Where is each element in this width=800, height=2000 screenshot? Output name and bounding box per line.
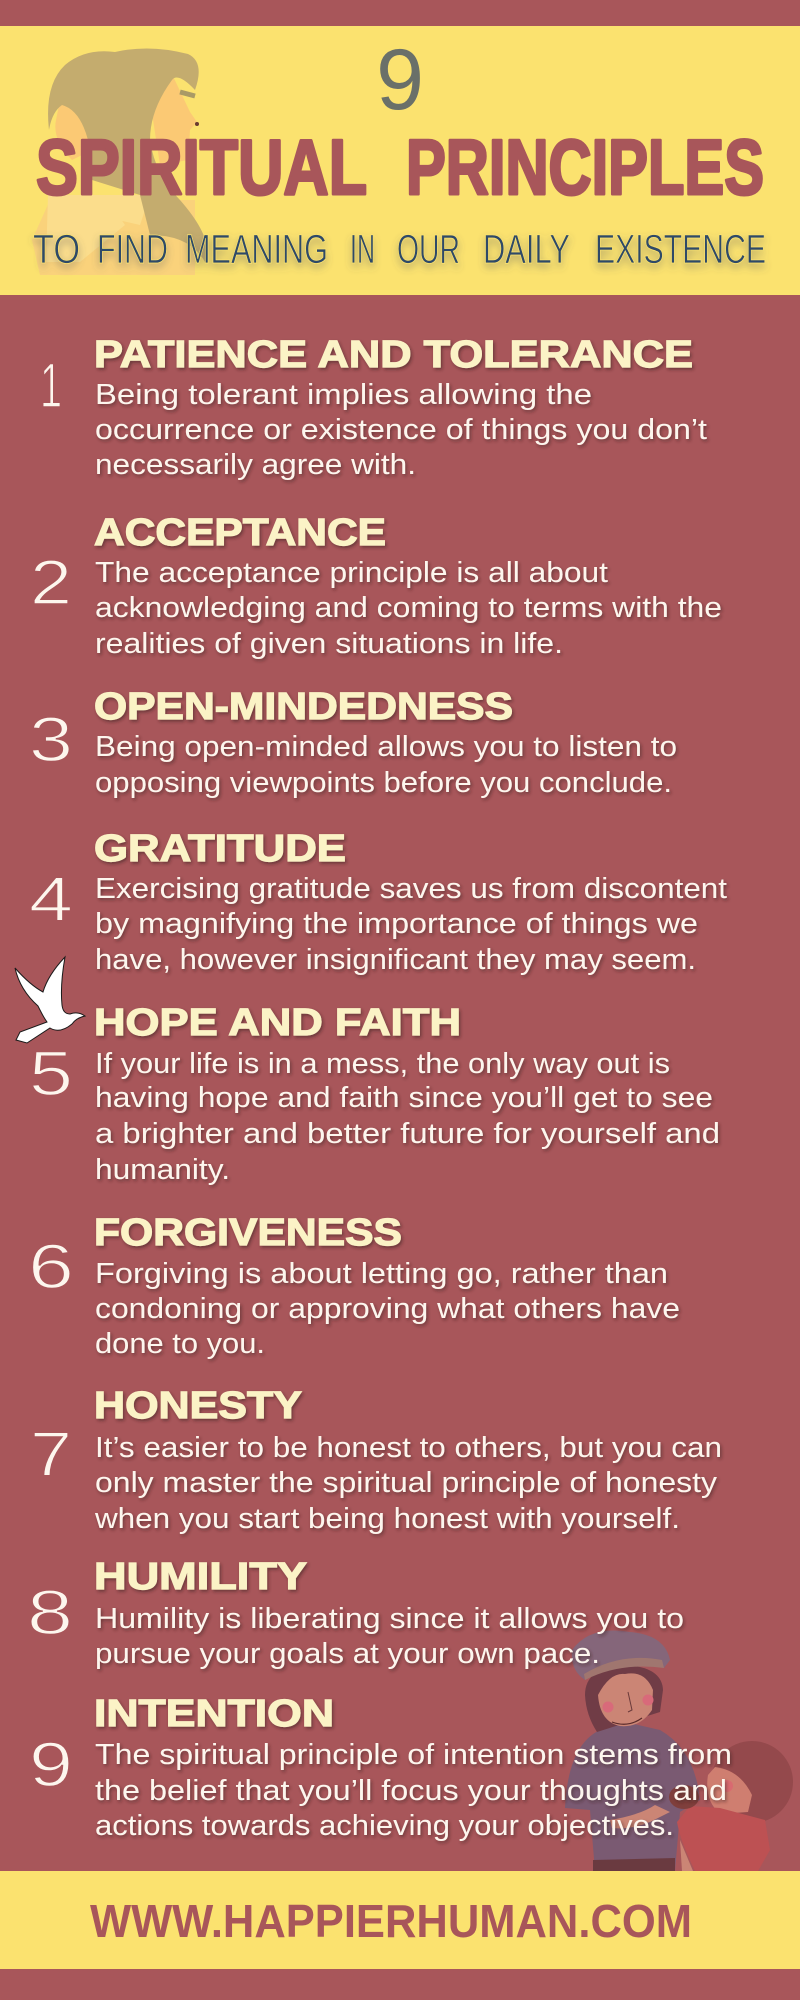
subtitle: IN xyxy=(350,226,375,272)
item 8: humility: pursue your goals at your own pace. xyxy=(95,1638,600,1670)
header band xyxy=(0,26,800,295)
item 6: forgiveness: 6 xyxy=(28,1232,74,1302)
item 9: intention: actions towards achieving your objectives. xyxy=(95,1810,674,1842)
item 7: honesty xyxy=(30,1385,722,1535)
item 7: honesty: when you start being honest with yourself. xyxy=(94,1503,680,1535)
subtitle: DAILY xyxy=(483,226,570,272)
item 5: hope and faith: HOPE AND FAITH xyxy=(94,1002,461,1044)
item 9: intention: 9 xyxy=(29,1730,73,1800)
item 4: gratitude: 4 xyxy=(29,865,73,935)
item 9: intention: INTENTION xyxy=(94,1693,334,1735)
item 5: hope and faith: 5 xyxy=(29,1039,73,1109)
footer band xyxy=(0,1871,800,1969)
item 3: open-mindedness: Being open-minded allows you to listen to xyxy=(95,731,677,763)
illustration: officer and child xyxy=(565,1630,793,1871)
item 5: hope and faith: having hope and faith since you’ll get to see xyxy=(95,1082,713,1114)
heading number 9: 9 xyxy=(376,32,424,128)
item 1: patience and tolerance: PATIENCE AND TOLERANCE xyxy=(94,334,693,376)
item 6: forgiveness: FORGIVENESS xyxy=(94,1212,402,1254)
item 6: forgiveness: condoning or approving what others have xyxy=(95,1293,680,1325)
item 5: hope and faith: If your life is in a mess, the only way out is xyxy=(95,1048,670,1080)
item 8: humility: HUMILITY xyxy=(94,1556,307,1598)
item 1: patience and tolerance: occurrence or existence of things you don’t xyxy=(95,414,707,446)
item 1: patience and tolerance: Being tolerant implies allowing the xyxy=(95,379,592,411)
item 2: acceptance: acknowledging and coming to terms with the xyxy=(95,592,722,624)
item 5: hope and faith xyxy=(29,1002,720,1186)
item 1: patience and tolerance: necessarily agree with. xyxy=(95,449,416,481)
item 3: open-mindedness: OPEN-MINDEDNESS xyxy=(94,686,513,728)
item 2: acceptance: The acceptance principle is all about xyxy=(95,557,608,589)
item 6: forgiveness: Forgiving is about letting go, rather than xyxy=(95,1258,668,1290)
subtitle: MEANING xyxy=(185,226,328,272)
item 5: hope and faith: humanity. xyxy=(95,1154,230,1186)
item 7: honesty: only master the spiritual principle of honesty xyxy=(95,1467,718,1499)
icon: white dove xyxy=(15,957,85,1043)
item 4: gratitude: by magnifying the importance of things we xyxy=(95,908,698,940)
item 3: open-mindedness: 3 xyxy=(29,705,73,775)
item 8: humility: 8 xyxy=(27,1578,73,1648)
item 2: acceptance: 2 xyxy=(30,548,72,618)
title: SPIRITUAL xyxy=(36,123,367,211)
item 9: intention xyxy=(29,1693,732,1842)
item 4: gratitude: Exercising gratitude saves us from discontent xyxy=(95,873,727,905)
item 6: forgiveness xyxy=(28,1212,680,1360)
subtitle: TO xyxy=(33,226,80,272)
item 5: hope and faith: a brighter and better future for yourself and xyxy=(95,1118,720,1150)
illustration: two women xyxy=(32,48,207,275)
item 7: honesty: It’s easier to be honest to others, but you can xyxy=(95,1432,722,1464)
item 1: patience and tolerance xyxy=(40,334,707,481)
item 2: acceptance xyxy=(30,512,722,660)
item 6: forgiveness: done to you. xyxy=(95,1328,265,1360)
item 2: acceptance: realities of given situations in life. xyxy=(95,628,563,660)
item 4: gratitude: have, however insignificant they may seem. xyxy=(95,944,696,976)
item 3: open-mindedness xyxy=(29,686,677,799)
item 7: honesty: HONESTY xyxy=(94,1385,302,1427)
item 1: patience and tolerance: 1 xyxy=(40,351,62,421)
item 2: acceptance: ACCEPTANCE xyxy=(94,512,386,554)
item 3: open-mindedness: opposing viewpoints before you conclude. xyxy=(95,767,672,799)
item 9: intention: The spiritual principle of intention stems from xyxy=(95,1739,732,1771)
item 4: gratitude xyxy=(29,828,727,976)
title xyxy=(36,123,764,211)
subtitle: OUR xyxy=(397,226,460,272)
item 7: honesty: 7 xyxy=(30,1420,72,1490)
item 8: humility: Humility is liberating since it allows you to xyxy=(95,1603,684,1635)
subtitle: FIND xyxy=(97,226,168,272)
item 4: gratitude: GRATITUDE xyxy=(94,828,346,870)
item 8: humility xyxy=(27,1556,684,1670)
item 9: intention: the belief that you’ll focus your thoughts and xyxy=(95,1775,727,1807)
website url: WWW.HAPPIERHUMAN.COM xyxy=(90,1895,692,1947)
subtitle xyxy=(33,226,766,272)
